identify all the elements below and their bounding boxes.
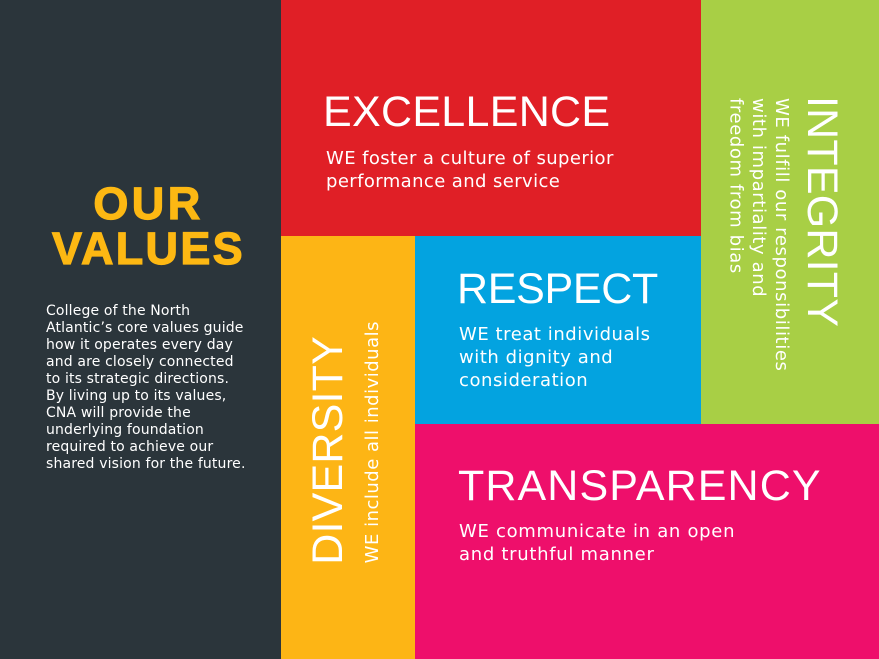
panel: diversity <box>281 236 415 659</box>
text block: respect: WE treat individuals <box>459 324 651 345</box>
text block: integrity: with impartiality and <box>748 98 769 297</box>
heading: excellence: EXCELLENCE <box>323 88 610 136</box>
panel: intro sidebar <box>0 0 281 659</box>
heading: respect: RESPECT <box>457 265 658 313</box>
text block: integrity <box>726 98 792 371</box>
text block: transparency <box>459 521 735 565</box>
text block: excellence: performance and service <box>326 171 560 192</box>
text block: diversity: WE include all individuals <box>362 321 383 563</box>
heading: diversity: DIVERSITY <box>304 336 352 565</box>
text block: intro: required to achieve our <box>46 439 213 455</box>
panel: respect <box>415 236 701 424</box>
text block: integrity: WE fulfill our responsibilities <box>771 98 792 371</box>
text block: intro: shared vision for the future. <box>46 456 246 472</box>
text block: intro: Atlantic’s core values guide <box>46 320 244 336</box>
text block: intro: to its strategic directions. <box>46 371 229 387</box>
panel: transparency <box>415 424 879 659</box>
text block: intro: By living up to its values, <box>46 388 226 404</box>
text block: intro: CNA will provide the <box>46 405 191 421</box>
text block: intro <box>46 303 246 472</box>
heading: integrity: INTEGRITY <box>798 96 846 327</box>
text block: respect: consideration <box>459 370 588 391</box>
text block: intro: College of the North <box>46 303 190 319</box>
heading: transparency: TRANSPARENCY <box>458 462 822 510</box>
text block: transparency: and truthful manner <box>459 544 655 565</box>
text block: integrity: freedom from bias <box>726 98 747 274</box>
text block: intro: and are closely connected <box>46 354 234 370</box>
panel: excellence <box>281 0 701 236</box>
text block: intro: underlying foundation <box>46 422 204 438</box>
text block: respect: with dignity and <box>459 347 613 368</box>
text block: excellence <box>326 148 614 192</box>
text block: transparency: WE communicate in an open <box>459 521 735 542</box>
text block: intro: how it operates every day <box>46 337 233 353</box>
heading: our values <box>52 178 245 274</box>
heading: our values: VALUES <box>52 223 245 274</box>
heading: our values: OUR <box>93 178 204 229</box>
panel: integrity <box>701 0 879 424</box>
text block: excellence: WE foster a culture of superior <box>326 148 614 169</box>
text block: respect <box>459 324 651 391</box>
